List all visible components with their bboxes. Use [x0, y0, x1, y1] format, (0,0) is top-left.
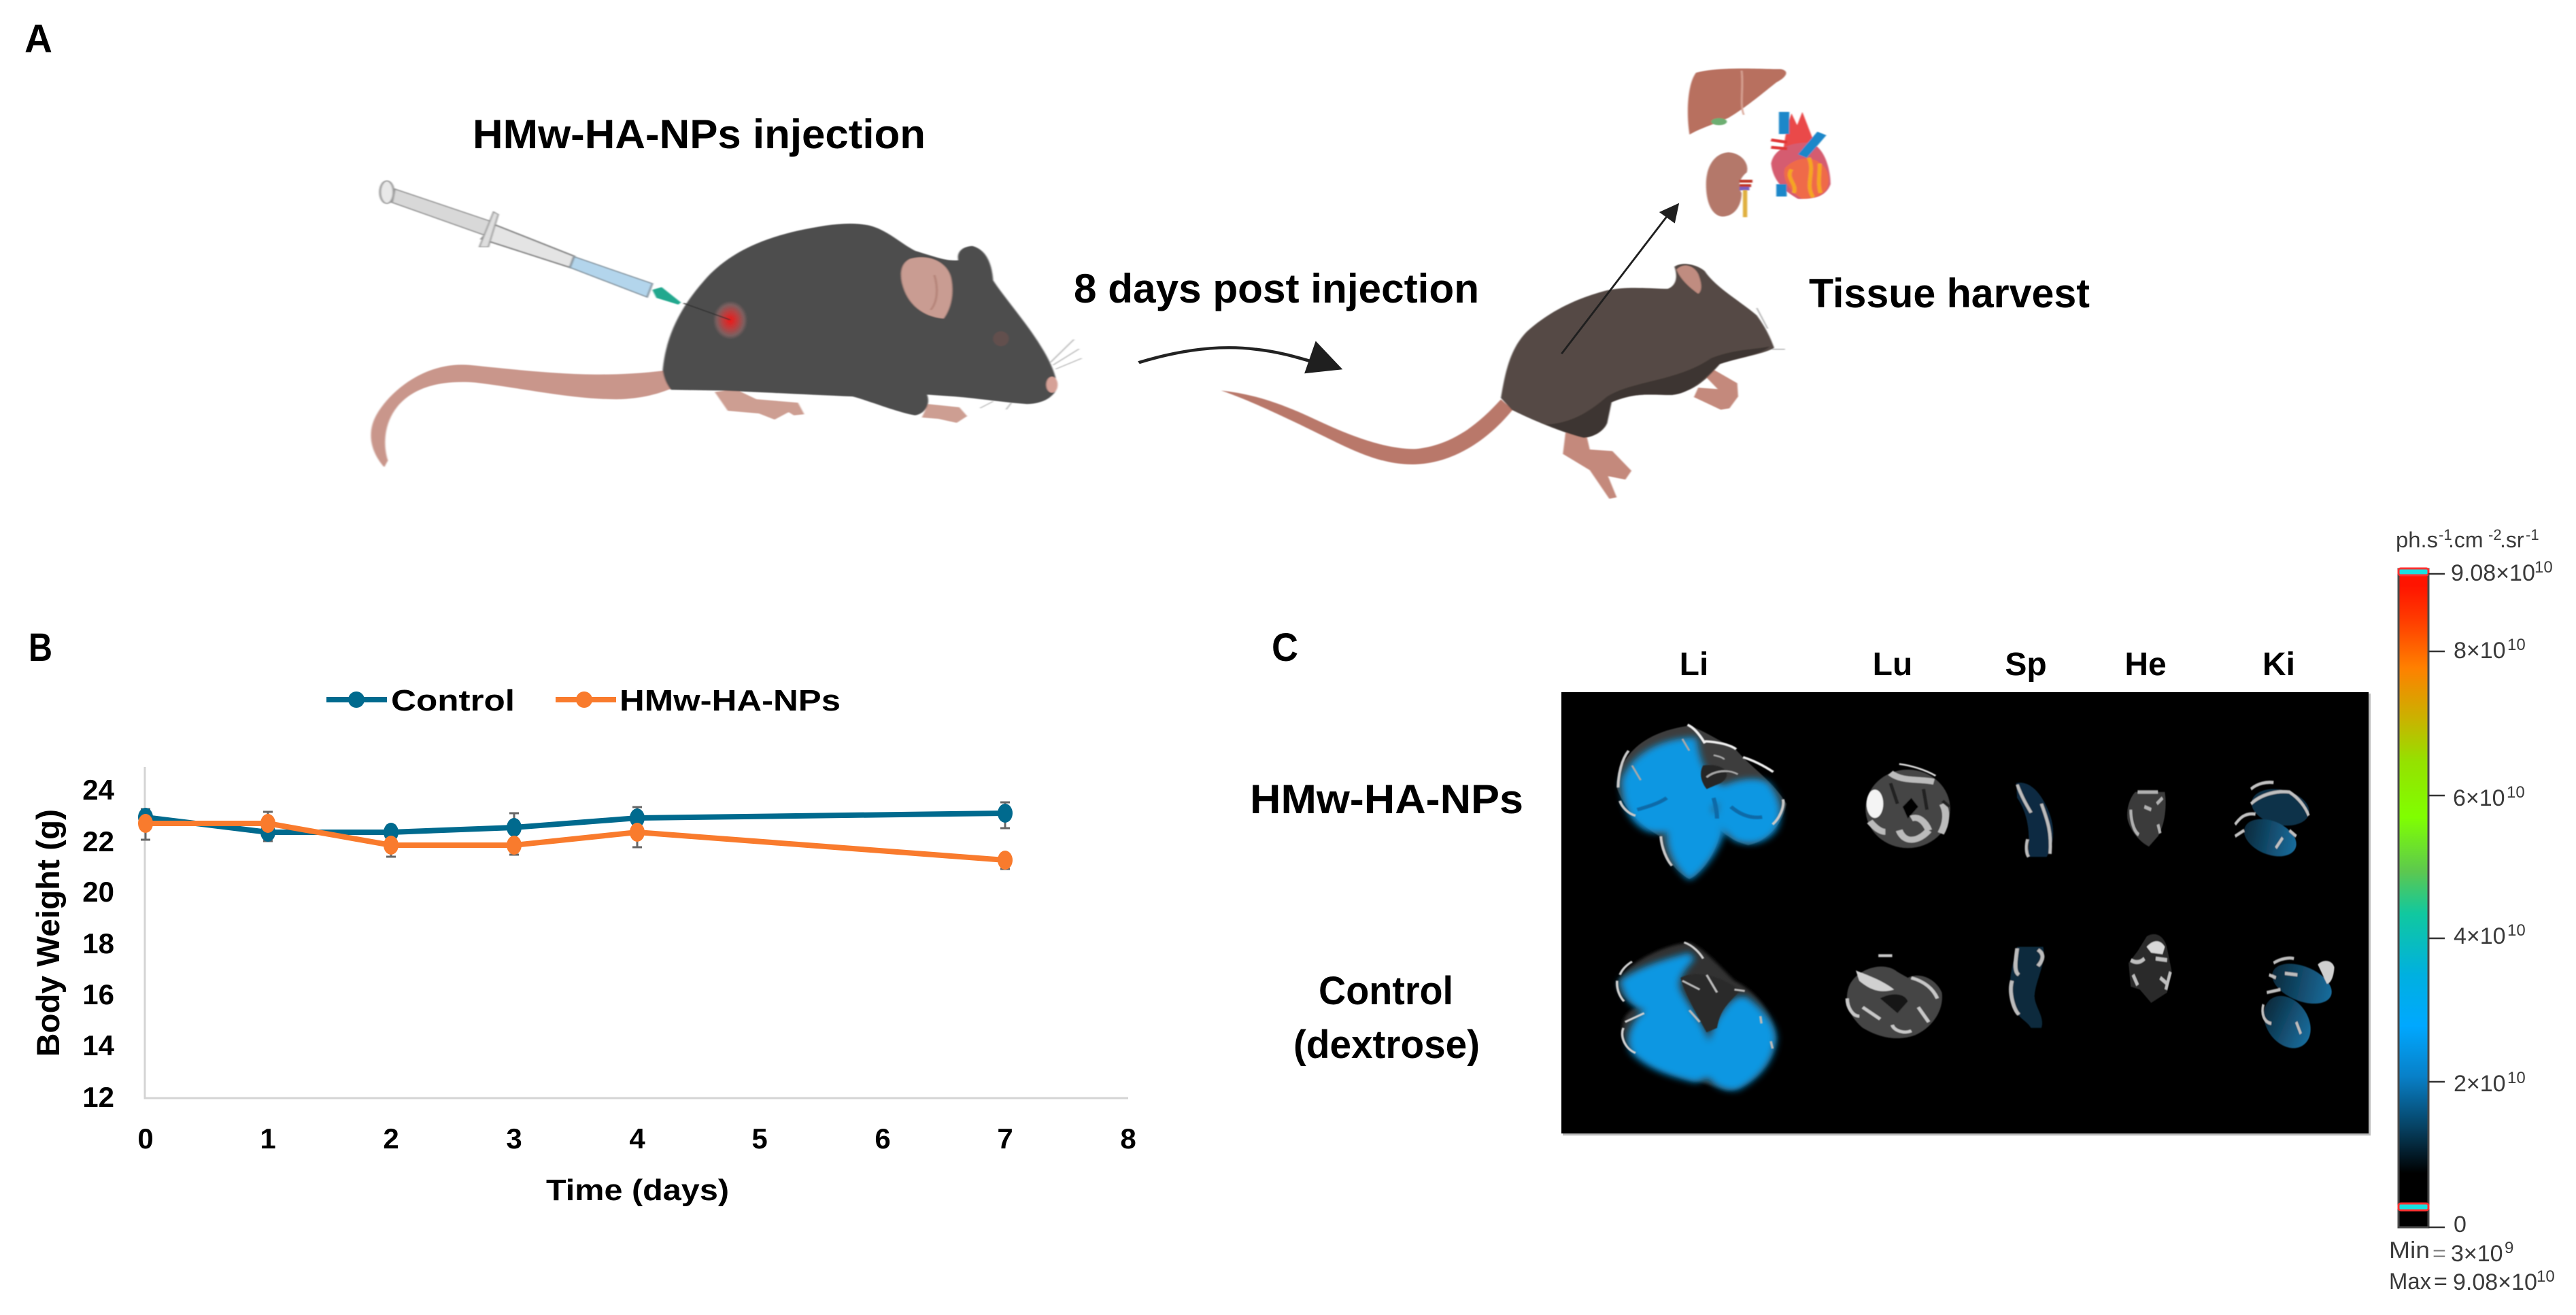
mouse belly shadow — [1546, 346, 1769, 438]
heading: time point: 8 days post injection — [1074, 266, 1479, 311]
organ column labels: Ki — [2263, 647, 2295, 683]
max value: = — [2434, 1269, 2447, 1295]
organ column labels: Sp — [2005, 647, 2047, 683]
colour scale bar — [2389, 526, 2555, 1295]
heart: control — [2129, 934, 2171, 1003]
x axis tick labels: 1 — [260, 1123, 276, 1155]
scale values: 4×10 — [2454, 923, 2506, 949]
y axis tick labels: 18 — [82, 927, 114, 959]
syringe flanges — [380, 181, 394, 203]
scale values: 10 — [2535, 558, 2553, 577]
max value: 10 — [2537, 1267, 2555, 1286]
scale title: .cm — [2448, 528, 2484, 552]
x axis tick labels: 2 — [383, 1123, 399, 1155]
mouse ear — [1676, 265, 1701, 294]
scale title: ph.s — [2396, 528, 2438, 552]
spleen: HMw-HA-NPs — [2016, 783, 2053, 857]
icon: liver — [1688, 69, 1786, 135]
legend — [326, 684, 841, 717]
liver: control — [1616, 942, 1776, 1091]
x axis tick labels: 6 — [875, 1123, 891, 1155]
scale values: 0 — [2454, 1212, 2467, 1237]
row label: treated: HMw-HA-NPs — [1250, 776, 1523, 822]
scale values: 8×10 — [2454, 638, 2506, 664]
mouse ear — [901, 257, 952, 319]
legend: Control — [391, 684, 515, 717]
icon: heart — [1771, 112, 1831, 199]
panel label A: A — [24, 17, 52, 61]
y axis tick labels: 20 — [82, 876, 114, 908]
min value — [2389, 1237, 2513, 1267]
x axis tick labels: 7 — [997, 1123, 1013, 1155]
chart axes — [145, 767, 1128, 1098]
liver: HMw-HA-NPs — [1616, 725, 1786, 881]
legend: HMw-HA-NPs — [620, 684, 841, 717]
mouse tail — [1221, 390, 1512, 464]
scale title: -2 — [2488, 526, 2502, 543]
mouse tail — [371, 364, 673, 467]
max value: Max — [2389, 1269, 2431, 1295]
series: control — [138, 804, 1013, 842]
max value — [2389, 1267, 2555, 1295]
y axis tick labels: 16 — [82, 978, 114, 1010]
kidneys: control — [2256, 956, 2335, 1059]
organ column labels — [1680, 647, 2295, 683]
row label: control: Control — [1319, 969, 1453, 1013]
syringe hub — [652, 287, 681, 305]
mouse hind legs — [1563, 419, 1631, 499]
syringe barrel — [481, 224, 574, 267]
x axis tick labels: 5 — [751, 1123, 768, 1155]
scale values: 10 — [2507, 783, 2525, 802]
imaging frame — [1561, 692, 2371, 1135]
mouse hind foot — [715, 390, 804, 420]
panel A: injection and harvest schematic — [371, 69, 2090, 499]
icon: kidney — [1706, 152, 1752, 217]
x axis tick labels: 8 — [1120, 1123, 1136, 1155]
lung: HMw-HA-NPs — [1865, 764, 1950, 848]
mouse front paws — [1694, 367, 1738, 410]
row label: control: (dextrose) — [1293, 1023, 1480, 1067]
x axis tick labels: 0 — [137, 1123, 154, 1155]
series: HMw-HA-NPs — [138, 814, 1013, 870]
y axis tick labels — [82, 774, 115, 1113]
arrow: curved time arrow — [1138, 341, 1342, 373]
scale title: -1 — [2439, 526, 2452, 543]
scale values: 9.08×10 — [2451, 560, 2535, 586]
lung: control — [1847, 956, 1942, 1038]
mouse eye — [993, 331, 1009, 346]
panel label B: B — [29, 626, 52, 670]
syringe needle — [683, 303, 730, 320]
mouse body — [662, 224, 1057, 415]
syringe plunger — [392, 189, 492, 235]
row label: control — [1293, 969, 1480, 1067]
scale values: 6×10 — [2453, 785, 2505, 811]
x axis tick labels: 4 — [629, 1123, 645, 1155]
scale values: 10 — [2507, 1069, 2526, 1087]
icon: injected mouse with syringe — [371, 181, 1082, 467]
mouse whiskers — [1757, 308, 1785, 349]
organ column labels: He — [2124, 647, 2167, 683]
mouse body — [1501, 264, 1774, 438]
y axis tick labels: 12 — [82, 1081, 114, 1113]
panel label C: C — [1272, 626, 1298, 670]
icon: harvested mouse — [1221, 264, 1785, 499]
error bars — [141, 802, 1010, 869]
scale values: 10 — [2507, 921, 2526, 940]
spleen: control — [2010, 946, 2044, 1028]
y axis tick labels: 24 — [82, 774, 115, 806]
injection site — [713, 301, 747, 339]
organ column labels: Lu — [1873, 647, 1912, 683]
y axis tick labels: 14 — [82, 1029, 115, 1061]
min value: Min — [2389, 1237, 2430, 1263]
organ column labels: Li — [1680, 647, 1708, 683]
scale values: 2×10 — [2454, 1071, 2506, 1097]
x axis tick labels: 3 — [506, 1123, 522, 1155]
arrow: to organs — [1561, 203, 1679, 354]
min value: 3×10 — [2451, 1241, 2503, 1267]
scale title: -1 — [2526, 526, 2539, 543]
mouse front foot — [922, 404, 967, 423]
mouse nose — [1047, 377, 1057, 393]
scale ticks — [2428, 574, 2445, 1227]
y axis title: Body Weight (g) — [30, 809, 66, 1057]
panel B: body weight line chart — [30, 684, 1136, 1207]
max value: 9.08×10 — [2453, 1269, 2537, 1295]
gradient bar — [2399, 568, 2428, 1227]
scale values: 10 — [2507, 636, 2526, 654]
heart: HMw-HA-NPs — [2127, 792, 2166, 847]
mouse whiskers — [980, 339, 1082, 409]
scale values — [2451, 558, 2553, 1237]
heading: injection: HMw-HA-NPs injection — [473, 112, 926, 157]
panel C: ex vivo organ imaging — [1250, 647, 2371, 1135]
min value: = — [2433, 1241, 2446, 1267]
scale title — [2396, 526, 2539, 552]
y axis tick labels: 22 — [82, 825, 114, 857]
min value: 9 — [2505, 1239, 2513, 1257]
scale title: .sr — [2500, 528, 2524, 552]
heading: tissue harvest: Tissue harvest — [1809, 271, 2090, 316]
x axis tick labels — [137, 1123, 1136, 1155]
syringe fluid — [570, 257, 652, 297]
kidneys: HMw-HA-NPs — [2235, 783, 2311, 863]
x axis title: Time (days) — [546, 1174, 729, 1207]
